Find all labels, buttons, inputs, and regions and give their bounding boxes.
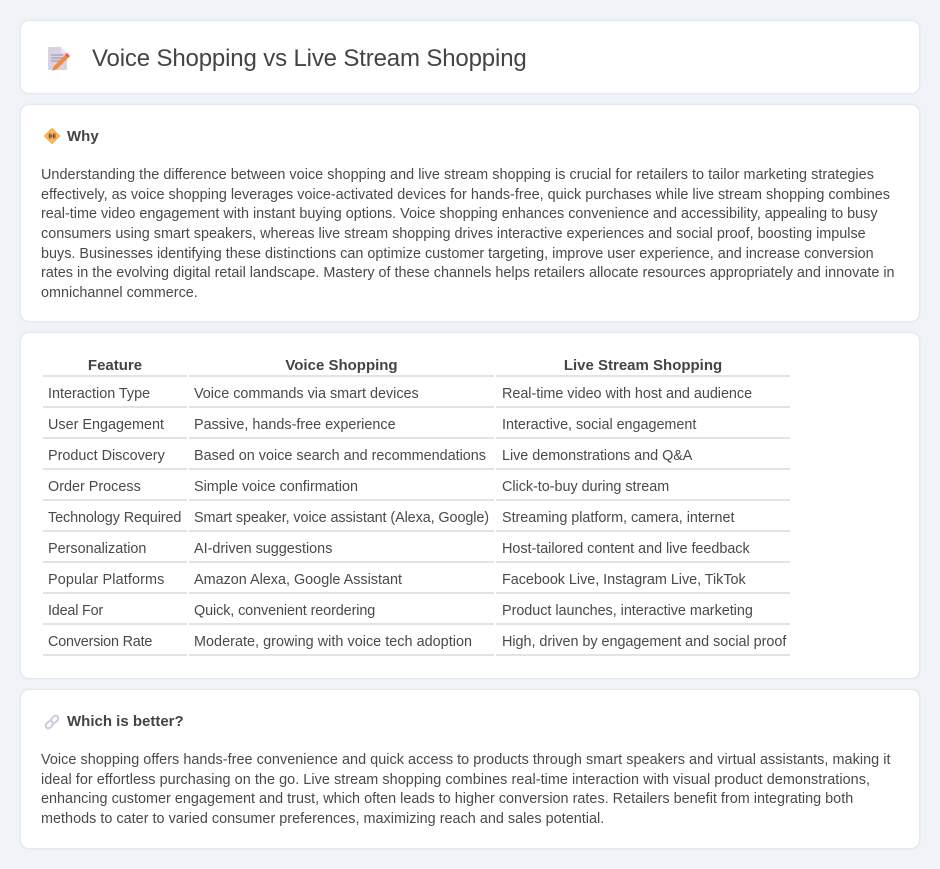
panel: comparison table card bbox=[20, 332, 920, 679]
icon: warning diamond bbox=[44, 128, 60, 144]
header card bbox=[20, 20, 920, 94]
comparison table: Technology Required bbox=[48, 510, 181, 526]
comparison table bbox=[43, 357, 790, 656]
text: ideal for effortless purchasing on the go. Live stream shopping combines real-time interaction with visual product demonstrations, bbox=[41, 772, 870, 788]
comparison table: Passive, hands-free experience bbox=[194, 417, 396, 433]
text: enhancing customer engagement and trust, which often leads to higher conversion rates. Retailers benefit from integrating both bbox=[41, 791, 853, 807]
comparison table: Product launches, interactive marketing bbox=[502, 603, 753, 619]
comparison table: Interactive, social engagement bbox=[502, 417, 696, 433]
title: Voice Shopping vs Live Stream Shopping bbox=[92, 45, 527, 72]
text: omnichannel commerce. bbox=[41, 285, 198, 301]
icon: link bbox=[44, 714, 60, 730]
text: rates in the evolving digital retail landscape. Mastery of these channels helps retailers allocate resources appropriately and innovate in bbox=[41, 265, 895, 281]
comparison table: Amazon Alexa, Google Assistant bbox=[194, 572, 402, 588]
text: consumers using smart speakers, whereas live stream shopping drives interactive experiences and social proof, boosting impulse bbox=[41, 226, 866, 242]
comparison table: Based on voice search and recommendations bbox=[194, 448, 486, 464]
icon: memo with pencil bbox=[48, 47, 70, 71]
comparison table: Interaction Type bbox=[48, 386, 150, 402]
comparison table: Smart speaker, voice assistant (Alexa, Google) bbox=[194, 510, 489, 526]
heading: which is better: Which is better? bbox=[67, 713, 184, 730]
comparison table: Click-to-buy during stream bbox=[502, 479, 669, 495]
text: effectively, as voice shopping leverages voice-activated devices for hands-free, quick purchases while live stream shopping combines bbox=[41, 187, 890, 203]
which is better text bbox=[41, 752, 891, 827]
comparison table: Live Stream Shopping bbox=[564, 357, 722, 374]
why text bbox=[41, 167, 895, 301]
text: Understanding the difference between voice shopping and live stream shopping is crucial for retailers to tailor marketing strategies bbox=[41, 167, 874, 183]
comparison table: Voice commands via smart devices bbox=[194, 386, 419, 402]
comparison table: Popular Platforms bbox=[48, 572, 164, 588]
panel: why bbox=[20, 104, 920, 322]
comparison table: Facebook Live, Instagram Live, TikTok bbox=[502, 572, 746, 588]
panel: which is better bbox=[20, 689, 920, 849]
comparison table: Order Process bbox=[48, 479, 141, 495]
comparison table: Quick, convenient reordering bbox=[194, 603, 375, 619]
text: Voice shopping offers hands-free convenience and quick access to products through smart speakers and virtual assistants, making it bbox=[41, 752, 891, 768]
comparison table: Streaming platform, camera, internet bbox=[502, 510, 734, 526]
comparison table: Moderate, growing with voice tech adoption bbox=[194, 634, 472, 650]
text: real-time video engagement with instant buying options. Voice shopping enhances convenience and accessibility, appealing to busy bbox=[41, 206, 878, 222]
comparison table: Ideal For bbox=[48, 603, 103, 619]
comparison table: Voice Shopping bbox=[285, 357, 398, 374]
comparison table: User Engagement bbox=[48, 417, 164, 433]
comparison table: Product Discovery bbox=[48, 448, 165, 464]
comparison table: Simple voice confirmation bbox=[194, 479, 358, 495]
text: buys. Businesses identifying these distinctions can optimize customer targeting, improve user experience, and increase conversion bbox=[41, 246, 874, 262]
comparison table: Host-tailored content and live feedback bbox=[502, 541, 750, 557]
comparison table: Feature bbox=[88, 357, 142, 374]
comparison table: Personalization bbox=[48, 541, 146, 557]
heading: why: Why bbox=[67, 128, 99, 145]
text: methods to cater to varied consumer preferences, maximizing reach and sales potential. bbox=[41, 811, 604, 827]
comparison table: AI-driven suggestions bbox=[194, 541, 332, 557]
comparison table: Conversion Rate bbox=[48, 634, 152, 650]
comparison table: Live demonstrations and Q&A bbox=[502, 448, 692, 464]
comparison table: High, driven by engagement and social proof bbox=[502, 634, 786, 650]
comparison table: Real-time video with host and audience bbox=[502, 386, 752, 402]
